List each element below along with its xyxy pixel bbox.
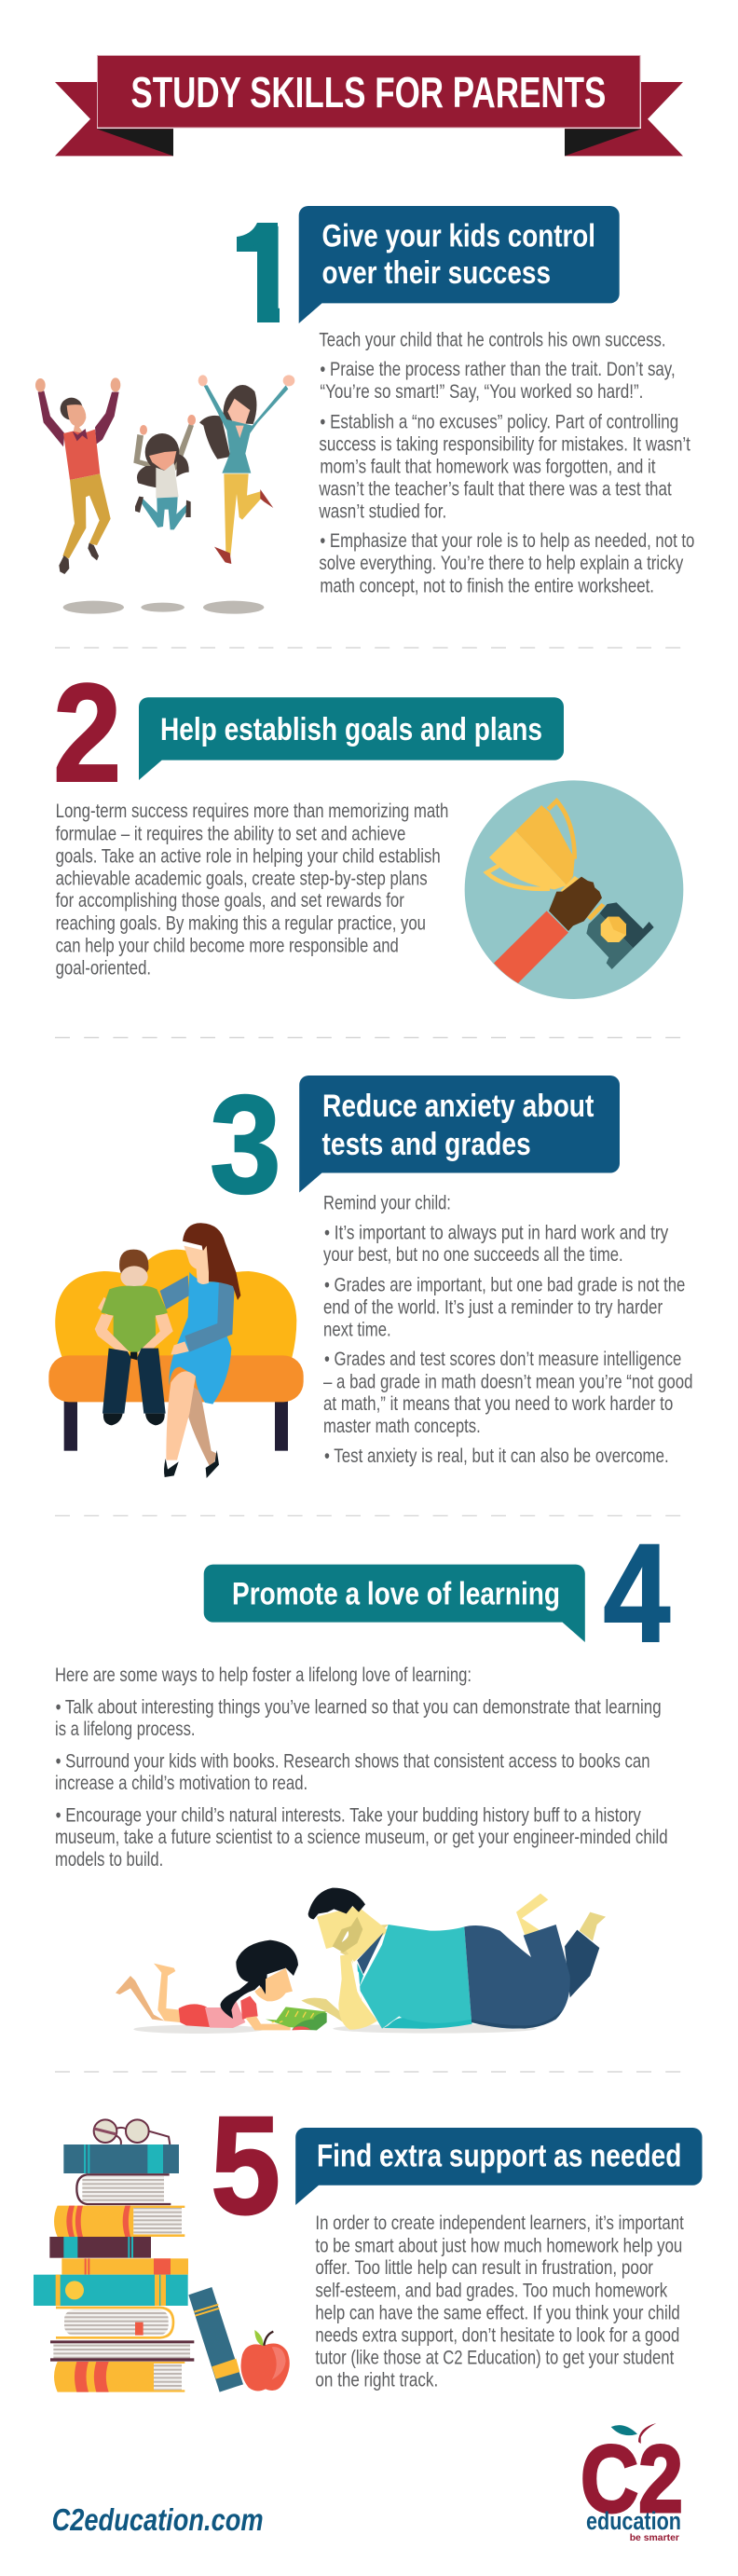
illustration: jumping family [35,375,294,614]
body text 4: Here are some ways to help foster a lifelong love of learning: [55,1665,472,1686]
body text 3: your best, but no one succeeds all the time. [323,1244,623,1266]
body text 3: end of the world. It’s just a reminder to try harder [323,1296,663,1318]
section 5 [34,2088,703,2392]
callout: find extra support [295,2128,703,2205]
number 1: 1 [226,196,304,352]
body text 1 [319,329,694,596]
body text 3: master math concepts. [323,1416,481,1437]
number 2: 2 [53,654,121,811]
body text 5 [315,2213,684,2391]
illustration: book stack and apple [34,2119,290,2392]
title banner [55,56,683,156]
logo: C2 education: C2 [581,2426,683,2532]
callout: reduce anxiety: Reduce anxiety about [322,1089,594,1124]
section 1 [35,196,694,614]
body text 3: • It’s important to always put in hard work and try [324,1223,669,1243]
body text 5: on the right track. [315,2369,438,2391]
callout: help establish goals [139,697,564,780]
body text 2: Long-term success requires more than memorizing math [56,801,448,822]
body text 2: formulae – it requires the ability to set and achieve [56,823,405,844]
body text 1: mom’s fault that homework was forgotten, and it [320,457,656,478]
body text 2: goals. Take an active role in helping your child establish [56,845,441,867]
body text 3: next time. [323,1320,391,1340]
illustration: parent and child on sofa [48,1223,304,1478]
title: STUDY SKILLS FOR PARENTS [130,68,606,116]
body text 2: goal-oriented. [56,958,151,979]
body text 4 [55,1665,668,1870]
callout: give your kids control: over their success [322,255,551,291]
number 3: 3 [210,1066,281,1223]
logo: C2 education: be smarter [630,2532,679,2543]
section 4 [55,1514,670,2034]
body text 2: achievable academic goals, create step-by-step plans [56,869,428,890]
number 4: 4 [604,1514,670,1671]
body text 2: can help your child become more responsible and [56,935,399,956]
callout: promote a love of learning: Promote a love of learning [232,1576,560,1611]
number 5: 5 [211,2088,280,2244]
body text 1: math concept, not to finish the entire worksheet. [320,575,654,596]
body text 2: reaching goals. By making this a regular practice, you [56,912,426,934]
body text 3 [323,1192,693,1467]
body text 3: Remind your child: [323,1192,451,1213]
callout: reduce anxiety [299,1076,620,1193]
callout: promote a love of learning [204,1565,585,1642]
callout: give your kids control [299,206,620,323]
body text 2 [56,801,448,979]
body text 2: for accomplishing those goals, and set rewards for [56,890,404,911]
section 3 [48,1066,693,1478]
body text 4: models to build. [55,1849,163,1870]
illustration: trophy in hand [465,780,683,999]
illustration: parent and child reading [116,1888,606,2034]
body text 4: increase a child’s motivation to read. [55,1773,308,1794]
body text 5: offer. Too little help can result in frustration, poor [315,2257,653,2279]
callout: help establish goals: Help establish goals and plans [160,712,542,747]
section 2 [53,654,683,999]
callout: reduce anxiety: tests and grades [322,1127,531,1162]
body text 1: wasn’t studied for. [319,500,446,522]
website url: C2education.com [52,2502,264,2537]
logo: C2 education: education [586,2507,681,2535]
body text 4: is a lifelong process. [55,1719,196,1740]
callout: give your kids control: Give your kids control [322,218,595,253]
number 1 [237,223,280,322]
body text 1: “You’re so smart!” Say, “You worked so hard!”. [320,381,643,403]
